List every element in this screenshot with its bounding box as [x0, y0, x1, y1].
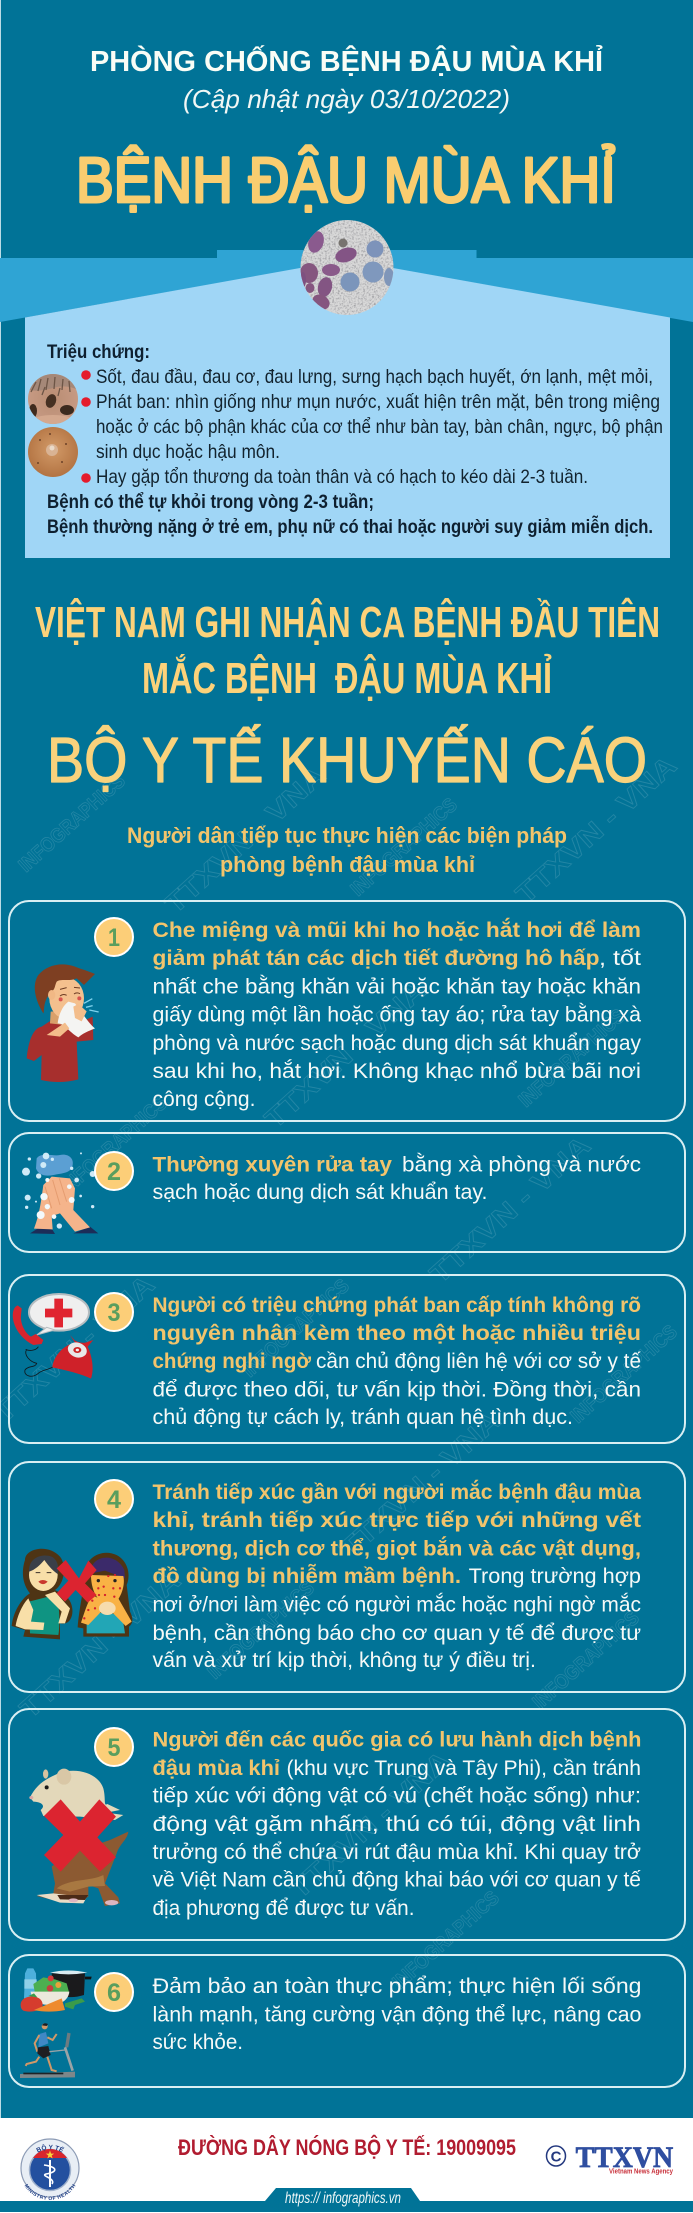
watermarks: INFOGRAPHICS: [529, 1607, 644, 1714]
symptoms text: Hay gặp tổn thương da toàn thân và có hạch to kéo dài 2-3 tuần.: [96, 466, 588, 488]
text: advice 4: Tránh tiếp xúc gần với người mắc bệnh đậu mùa: [152, 1479, 642, 1504]
logo: Ministry of Health: ★: [45, 2150, 55, 2160]
text: advice 4: khỉ, tránh tiếp xúc trực tiếp với những vết: [152, 1508, 641, 1532]
watermarks: INFOGRAPHICS: [567, 1321, 682, 1428]
text: advice 3: để được theo dõi, tư vấn kịp thời. Đồng thời, cần: [152, 1378, 641, 1402]
watermarks: INFOGRAPHICS: [239, 1275, 354, 1382]
heading: first case in Vietnam: [35, 597, 660, 703]
badge: number 1: [95, 918, 133, 956]
text: advice 3: chủ động tự cách ly, tránh quan hệ tình dục.: [152, 1405, 573, 1429]
logo: Ministry of Health: [20, 2138, 80, 2200]
watermarks: [0, 750, 682, 1994]
badge: number 3: [95, 1293, 133, 1331]
subheading: [127, 823, 567, 877]
text: advice 3: nguyên nhân kèm theo một hoặc nhiều triệu: [152, 1321, 641, 1345]
icon: runner on treadmill: [20, 2023, 75, 2078]
badge: number 6: 6: [107, 1979, 121, 2007]
logo: Ministry of Health: BỘ Y TẾ: [36, 2144, 64, 2152]
badge: number 5: 5: [108, 1734, 121, 1762]
card border: [9, 1275, 685, 1443]
panel: advice 4: [9, 1462, 685, 1692]
icon: mouse with red cross: [29, 1769, 128, 1906]
watermarks: TTXVN - VNA: [334, 1405, 506, 1564]
text: advice 6: [152, 1974, 642, 2054]
watermarks: INFOGRAPHICS: [389, 1887, 504, 1994]
subtitle: update date: (Cập nhật ngày 03/10/2022): [183, 84, 510, 114]
text: advice 5: (khu vực Trung và Tây Phi), cần tránh: [286, 1756, 641, 1780]
icon: person sneezing: [27, 964, 99, 1082]
icon: skin lesion photo 1: [28, 374, 78, 425]
text: advice 2: Thường xuyên rửa tay: [152, 1153, 392, 1177]
hotline: ĐƯỜNG DÂY NÓNG BỘ Y TẾ: 19009095: [178, 2135, 516, 2160]
icon: skin lesion photo 2: [28, 427, 78, 477]
banner band: [0, 250, 693, 322]
subheading: Người dân tiếp tục thực hiện các biện pháp: [127, 823, 567, 848]
watermarks: INFOGRAPHICS: [15, 770, 130, 877]
logo: TTXVN: [546, 2141, 673, 2176]
card border: [9, 1709, 685, 1940]
text: advice 6: lành mạnh, tăng cường vận động thể lực, nâng cao: [152, 2003, 642, 2027]
watermarks: INFOGRAPHICS: [515, 1005, 630, 1112]
card border: [9, 901, 685, 1121]
card border: [9, 1462, 685, 1692]
text: advice 5: địa phương để được tư vấn.: [152, 1896, 414, 1920]
symptoms text: sinh dục hoặc hậu môn.: [96, 441, 280, 463]
panel: advice 5: [9, 1709, 685, 1940]
symptoms text: Triệu chứng:: [47, 341, 150, 363]
text: advice 4: Trong trường hợp: [469, 1564, 641, 1588]
badge: number 4: [95, 1480, 133, 1518]
badge: number 5: [95, 1728, 133, 1766]
heading: first case in Vietnam: MẮC BỆNH ĐẬU MÙA KHỈ: [142, 653, 552, 703]
card border: [9, 1133, 685, 1252]
icon: healthy food: [21, 1968, 92, 2012]
icon: virus micrograph: [300, 220, 394, 315]
main heading: BỆNH ĐẬU MÙA KHỈ: [76, 143, 616, 216]
badge: number 3: 3: [108, 1299, 120, 1327]
text: advice 4: bệnh, cần thông báo cho cơ quan y tế để được tư: [152, 1621, 641, 1645]
panel: advice 6: [9, 1955, 685, 2087]
panel background: [25, 268, 670, 558]
watermarks: TTXVN - VNA: [284, 1745, 456, 1904]
icon: avoid contact with sick people: [12, 1549, 132, 1639]
text: advice 5: trưởng có thể chứa vi rút đậu mùa khỉ. Khi quay trở: [152, 1840, 641, 1864]
text: advice 1: nhất che bằng khăn vải hoặc khăn tay hoặc khăn: [152, 973, 641, 998]
watermarks: TTXVN - VNA: [14, 1565, 186, 1724]
text: advice 6: sức khỏe.: [152, 2030, 243, 2054]
text: advice 3: [152, 1293, 641, 1429]
panel: symptoms: [25, 220, 670, 558]
text: advice 4: đồ dùng bị nhiễm mầm bệnh.: [152, 1563, 461, 1588]
symptoms text: [47, 341, 663, 538]
watermarks: INFOGRAPHICS: [204, 1577, 319, 1684]
text: advice 4: vấn và xử trí kịp thời, không tự ý điều trị.: [152, 1648, 536, 1672]
text: advice 5: Người đến các quốc gia có lưu hành dịch bệnh: [152, 1728, 642, 1752]
bottom band with website: [0, 2188, 693, 2212]
text: advice 1: Che miệng và mũi khi ho hoặc hắt hơi để làm: [152, 917, 641, 942]
watermarks: TTXVN - VNA: [424, 1130, 596, 1289]
badge: number 4: 4: [107, 1486, 121, 1514]
bottom band with website: https:// infographics.vn: [285, 2190, 401, 2207]
card border: [9, 1955, 685, 2087]
title: PHÒNG CHỐNG BỆNH ĐẬU MÙA KHỈ: [90, 44, 603, 78]
text: advice 5: tiếp xúc với động vật có vú (chết hoặc sống) như:: [152, 1784, 641, 1808]
text: advice 1: , tốt: [599, 946, 641, 970]
logo: TTXVN: C: [551, 2148, 562, 2166]
panel: advice 2: [9, 1133, 685, 1252]
icon: hand washing: [22, 1152, 98, 1234]
subheading: phòng bệnh đậu mùa khỉ: [220, 852, 475, 877]
text: advice 5: [152, 1728, 642, 1920]
text: advice 4: [152, 1479, 642, 1672]
text: advice 2: bằng xà phòng và nước: [402, 1152, 641, 1177]
text: advice 3: cần chủ động liên hệ với cơ sở y tế: [316, 1349, 641, 1373]
text: advice 3: Người có triệu chứng phát ban cấp tính không rõ: [152, 1293, 641, 1317]
text: advice 6: Đảm bảo an toàn thực phẩm; thực hiện lối sống: [152, 1974, 642, 1998]
logo: TTXVN: Vietnam News Agency: [609, 2168, 673, 2176]
symptoms text: Bệnh có thể tự khỏi trong vòng 2-3 tuần;: [47, 491, 374, 513]
text: advice 1: sau khi ho, hắt hơi. Không khạc nhổ bừa bãi nơi: [152, 1058, 641, 1083]
text: advice 5: đậu mùa khỉ: [152, 1756, 280, 1780]
watermarks: INFOGRAPHICS: [347, 794, 462, 901]
watermarks: INFOGRAPHICS: [57, 1092, 172, 1199]
text: advice 1: [152, 917, 641, 1111]
text: advice 5: về Việt Nam cần chủ động khai báo với cơ quan y tế: [152, 1868, 641, 1892]
text: advice 2: sạch hoặc dung dịch sát khuẩn tay.: [152, 1180, 488, 1204]
badge: number 2: [95, 1152, 133, 1190]
text: advice 1: giấy dùng một lần hoặc ống tay áo; rửa tay bằng xà: [152, 1002, 641, 1027]
footer background: [0, 2118, 693, 2213]
logo: TTXVN: TTXVN: [576, 2141, 673, 2174]
badge: number 6: [95, 1973, 133, 2011]
badge: number 2: 2: [107, 1158, 121, 1186]
text: advice 2: [152, 1152, 641, 1204]
text: advice 1: phòng và nước sạch hoặc dung dịch sát khuẩn ngay: [152, 1031, 641, 1055]
text: advice 3: chứng nghi ngờ: [152, 1349, 312, 1373]
panel: advice 1: [9, 901, 685, 1121]
text: advice 4: thương, dịch cơ thể, giọt bắn và các vật dụng,: [152, 1536, 641, 1561]
text: advice 1: công cộng.: [152, 1087, 256, 1111]
text: advice 1: giảm phát tán các dịch tiết đường hô hấp: [152, 946, 600, 970]
logo: Ministry of Health: MINISTRY OF HEALTH: [24, 2184, 76, 2200]
footer: [0, 2134, 693, 2212]
watermarks: TTXVN - VNA: [510, 750, 682, 909]
watermarks: TTXVN - VNA: [259, 975, 431, 1134]
icon: phone and medical cross: [13, 1294, 93, 1379]
badge: number 1: 1: [108, 924, 120, 952]
text: advice 5: động vật gặm nhấm, thú có túi, động vật linh: [152, 1812, 641, 1836]
panel: advice 3: [9, 1275, 685, 1443]
watermarks: TTXVN - VNA: [159, 760, 331, 919]
text: advice 4: nơi ở/nơi làm việc có người mắc hoặc nghi ngờ mắc: [152, 1592, 641, 1617]
